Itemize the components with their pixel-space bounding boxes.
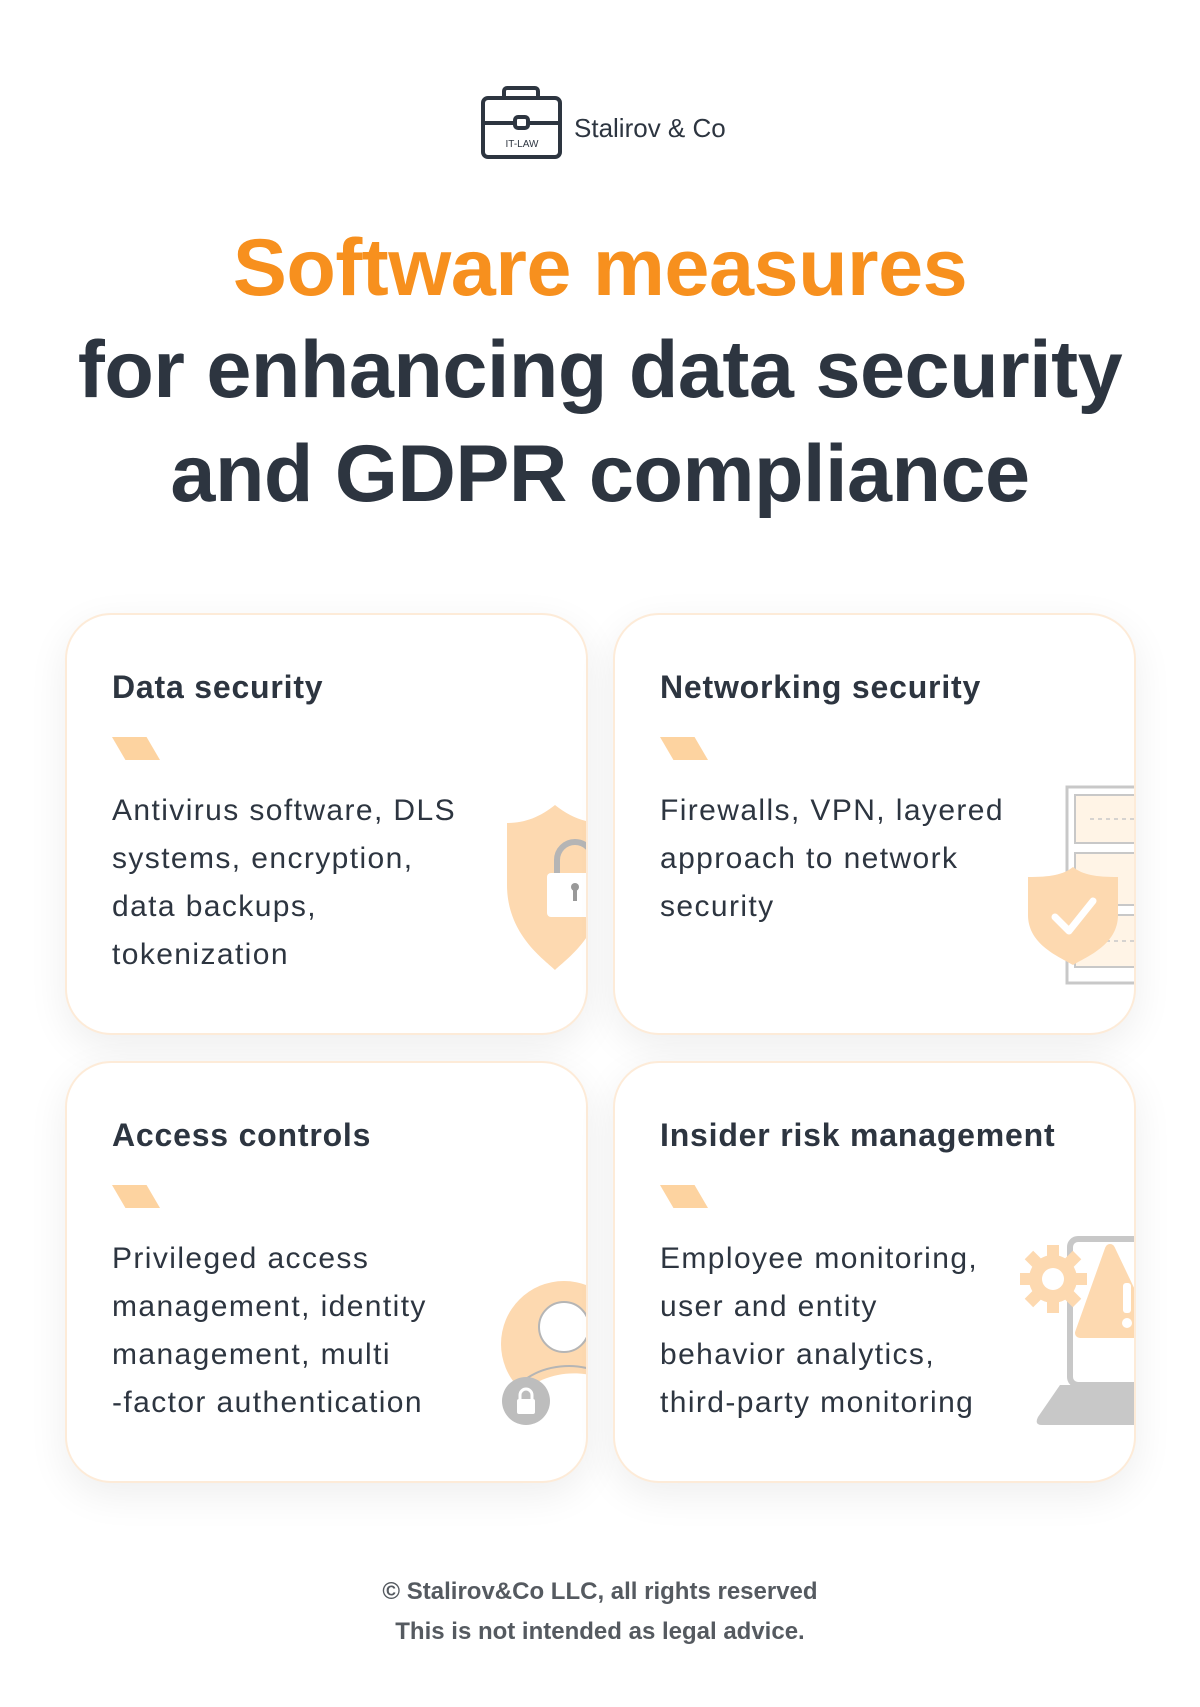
text: networking security [660,794,1004,923]
heading: access controls: Access controls [112,1117,371,1153]
text: networking security: security [660,890,775,923]
text: networking security: Firewalls, VPN, layered [660,794,1004,827]
text: data security: tokenization [112,938,289,971]
text: access controls: Privileged access [112,1242,369,1275]
footer: © Stalirov&Co LLC, all rights reserved [382,1578,818,1605]
title: for enhancing data security [78,325,1122,415]
footer: This is not intended as legal advice. [395,1618,805,1645]
icon: shield lock [507,805,586,970]
icon: laptop with warning and gear [1020,1236,1134,1425]
text: data security: systems, encryption, [112,842,413,875]
icon: briefcase [481,86,562,159]
text: access controls: management, identity [112,1290,427,1323]
heading: data security: Data security [112,669,323,705]
heading: insider risk management: Insider risk management [660,1117,1055,1153]
title [78,223,1122,519]
text: insider risk management: third-party monitoring [660,1386,974,1419]
logo text: Stalirov & Co [574,113,726,143]
text: access controls: management, multi [112,1338,391,1371]
title: and GDPR compliance [170,429,1030,519]
text: insider risk management: behavior analytics, [660,1338,935,1371]
panel: data security [65,613,588,1035]
panel: networking security [613,613,1136,1035]
title: Software measures [233,223,967,313]
icon: user with lock [501,1281,586,1425]
text: data security: Antivirus software, DLS [112,794,456,827]
panel: access controls [65,1061,588,1483]
text: data security [112,794,456,971]
text: insider risk management: user and entity [660,1290,878,1323]
panel: insider risk management [613,1061,1136,1483]
text: access controls [112,1242,427,1419]
logo [481,86,726,159]
text: data security: data backups, [112,890,317,923]
text: networking security: approach to network [660,842,958,875]
heading: networking security: Networking security [660,669,981,705]
icon: server with shield [1028,786,1134,984]
text: insider risk management: Employee monitoring, [660,1242,978,1275]
text: insider risk management [660,1242,978,1419]
text: access controls: -factor authentication [112,1386,423,1419]
icon: briefcase: IT-LAW [506,139,539,150]
footer [382,1578,818,1645]
